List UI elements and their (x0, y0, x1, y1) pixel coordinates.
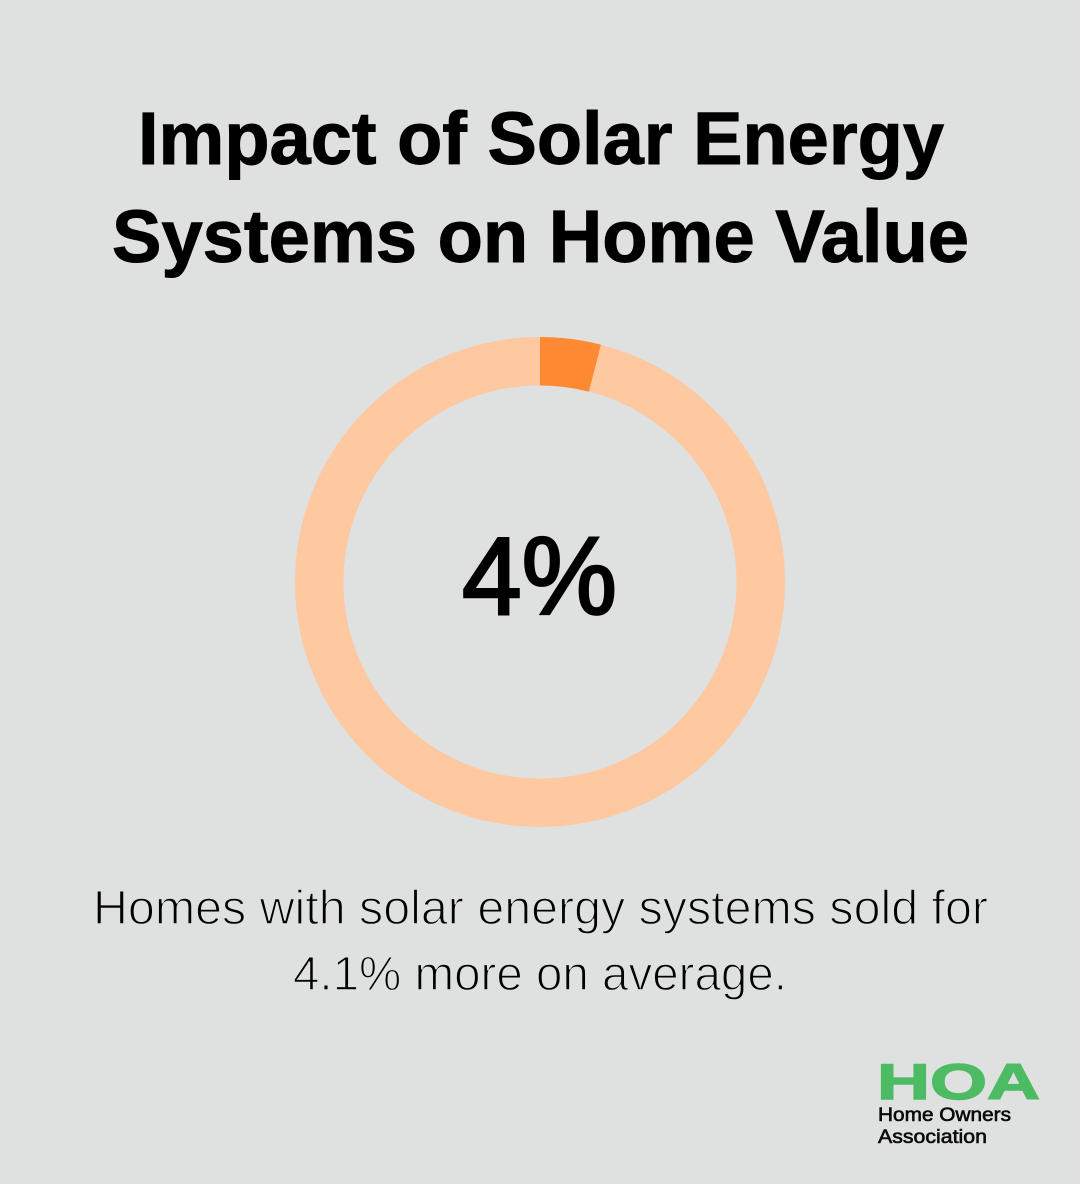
donut centre value: 4% (462, 515, 617, 638)
description text: 4.1% more on average. (293, 948, 787, 1001)
description text: Homes with solar energy systems sold for (93, 882, 988, 935)
logo wordmark: HOA (877, 1054, 1040, 1110)
logo caption (878, 1105, 1011, 1148)
title: Systems on Home Value (112, 195, 969, 278)
logo caption: Home Owners (878, 1105, 1011, 1126)
donut highlighted segment (540, 337, 601, 392)
description text (93, 882, 988, 1001)
donut chart: 4% (319, 337, 761, 803)
title: Impact of Solar Energy (138, 97, 944, 180)
logo caption: Association (878, 1127, 987, 1148)
logo: Home Owners Association (877, 1054, 1040, 1148)
title (112, 97, 969, 278)
donut track (319, 361, 761, 803)
